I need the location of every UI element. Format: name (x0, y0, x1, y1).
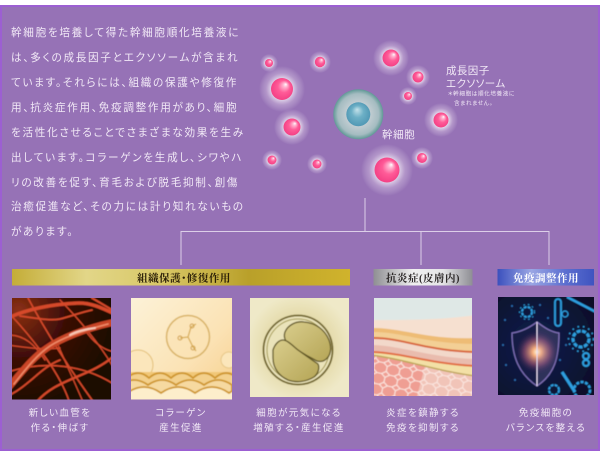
caption: collagen production: コラーゲン (155, 407, 207, 419)
photo: collagen (131, 298, 232, 400)
photo: blood vessels (12, 298, 111, 400)
caption: cell proliferation: 細胞が元気になる (256, 407, 342, 419)
category bar: immune regulation: 免疫調整作用 (513, 272, 579, 284)
caption: cell proliferation: 増殖する・産生促進 (253, 422, 345, 434)
bubble with molecule (131, 314, 232, 372)
label: growth factors and exosomes: 成長因子 (446, 65, 490, 77)
growth factor spheres (259, 40, 458, 196)
label: growth factors and exosomes: エクソソーム (446, 78, 506, 90)
diagram: stem cell with growth factors (259, 40, 515, 196)
viruses (520, 297, 596, 398)
shield (512, 322, 559, 386)
intro text block: 用、抗炎症作用、免疫調整作用があり、細胞 (11, 101, 238, 114)
category bar: tissue protection and repair (12, 269, 350, 286)
caption: collagen production: 産生促進 (159, 422, 203, 434)
intro text block: 幹細胞を培養して得た幹細胞順化培養液に (11, 26, 240, 39)
intro text block: があります。 (11, 225, 74, 238)
label: stem cell: 幹細胞 (382, 128, 415, 141)
label: growth factors and exosomes: ＊幹細胞は順化培養液に (447, 90, 515, 98)
caption: inflammation: 炎症を鎮静する (386, 407, 460, 419)
caption: immune balance: バランスを整える (506, 422, 586, 434)
label: growth factors and exosomes (446, 65, 515, 107)
caption: new blood vessels: 作る・伸ばす (31, 422, 89, 434)
caption: new blood vessels: 新しい血管を (29, 407, 91, 419)
intro text block: ています。それらには、組織の保護や修復作 (11, 76, 238, 89)
intro text block: 出しています。コラーゲンを生成し、シワやハ (11, 151, 243, 164)
caption: inflammation: 免疫を抑制する (386, 422, 460, 434)
intro text block: リの改善を促す、育毛および脱毛抑制、創傷 (11, 176, 239, 189)
category bar: anti-inflammatory (374, 269, 472, 286)
intro text block: は、多くの成長因子とエクソソームが含まれ (11, 51, 239, 64)
intro text block: を活性化させることでさまざまな効果を生み (11, 126, 245, 139)
caption: immune balance: 免疫細胞の (519, 407, 573, 419)
stem cell (333, 89, 383, 139)
intro text block: 治癒促進など、その力には計り知れないもの (11, 200, 245, 213)
label: growth factors and exosomes: 含まれません。 (454, 100, 493, 107)
category bar: tissue protection and repair: 組織保護・修復作用 (137, 272, 231, 284)
photo: shield and viruses (498, 297, 594, 395)
photo: dividing cell (250, 298, 349, 397)
category bar: immune regulation (498, 269, 594, 286)
category bar: anti-inflammatory: 抗炎症(皮膚内) (386, 272, 460, 284)
photo: skin layers (374, 298, 472, 396)
connector tree lines (181, 198, 549, 265)
golden scales (131, 372, 232, 378)
